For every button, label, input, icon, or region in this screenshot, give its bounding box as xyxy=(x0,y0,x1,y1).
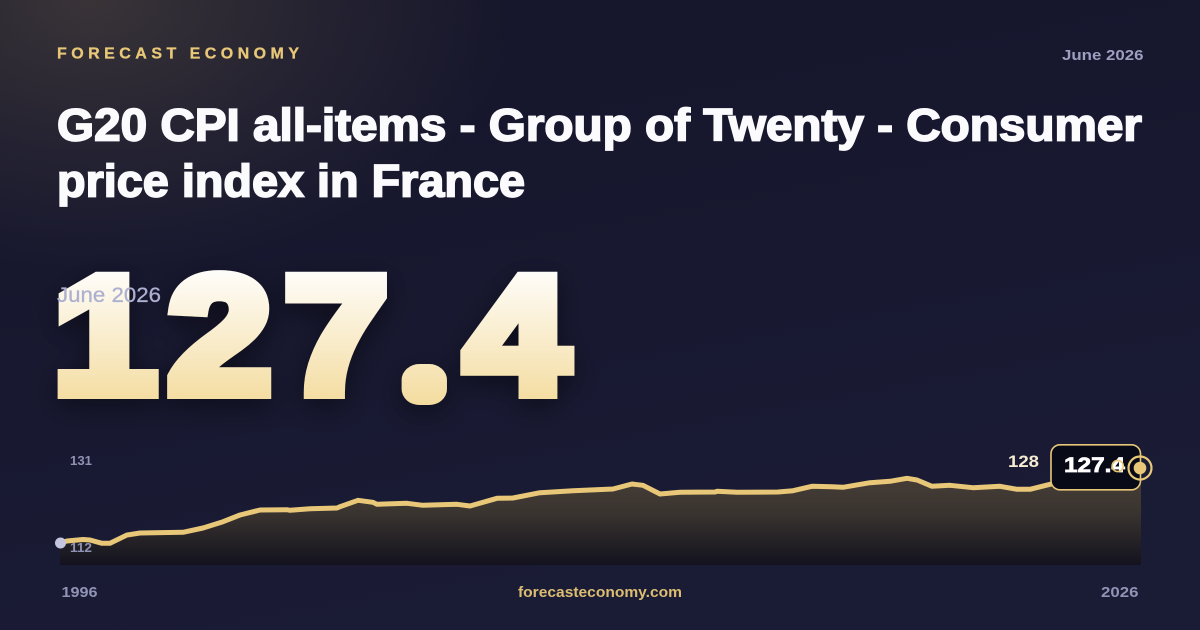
website: forecasteconomy.com xyxy=(518,584,682,601)
title xyxy=(57,100,1142,206)
start year: 1996 xyxy=(62,584,98,601)
chart line xyxy=(60,468,1140,543)
big value: 1 xyxy=(53,243,157,428)
end year: 2026 xyxy=(1101,584,1138,601)
chart area fill xyxy=(60,468,1141,565)
big value: 4 xyxy=(465,243,568,428)
value tag xyxy=(1051,445,1140,490)
end marker xyxy=(1128,456,1152,480)
big value: . xyxy=(415,335,434,402)
y axis min: 112 xyxy=(70,540,92,555)
big value xyxy=(53,243,568,428)
value date label: June 2026 xyxy=(57,284,161,307)
start point xyxy=(55,538,66,548)
value tag: 127.4 xyxy=(1064,454,1125,477)
title: G20 CPI all-items - Group of Twenty - Consumer xyxy=(57,100,1142,150)
big value: 2 xyxy=(168,243,271,428)
peak label: 128 xyxy=(1008,452,1039,471)
big value: 7 xyxy=(284,243,388,428)
brand label: FORECAST ECONOMY xyxy=(57,46,299,62)
title: price index in France xyxy=(57,156,525,206)
y axis max: 131 xyxy=(70,453,92,468)
date top right: June 2026 xyxy=(1062,47,1144,64)
area chart xyxy=(55,468,1141,565)
